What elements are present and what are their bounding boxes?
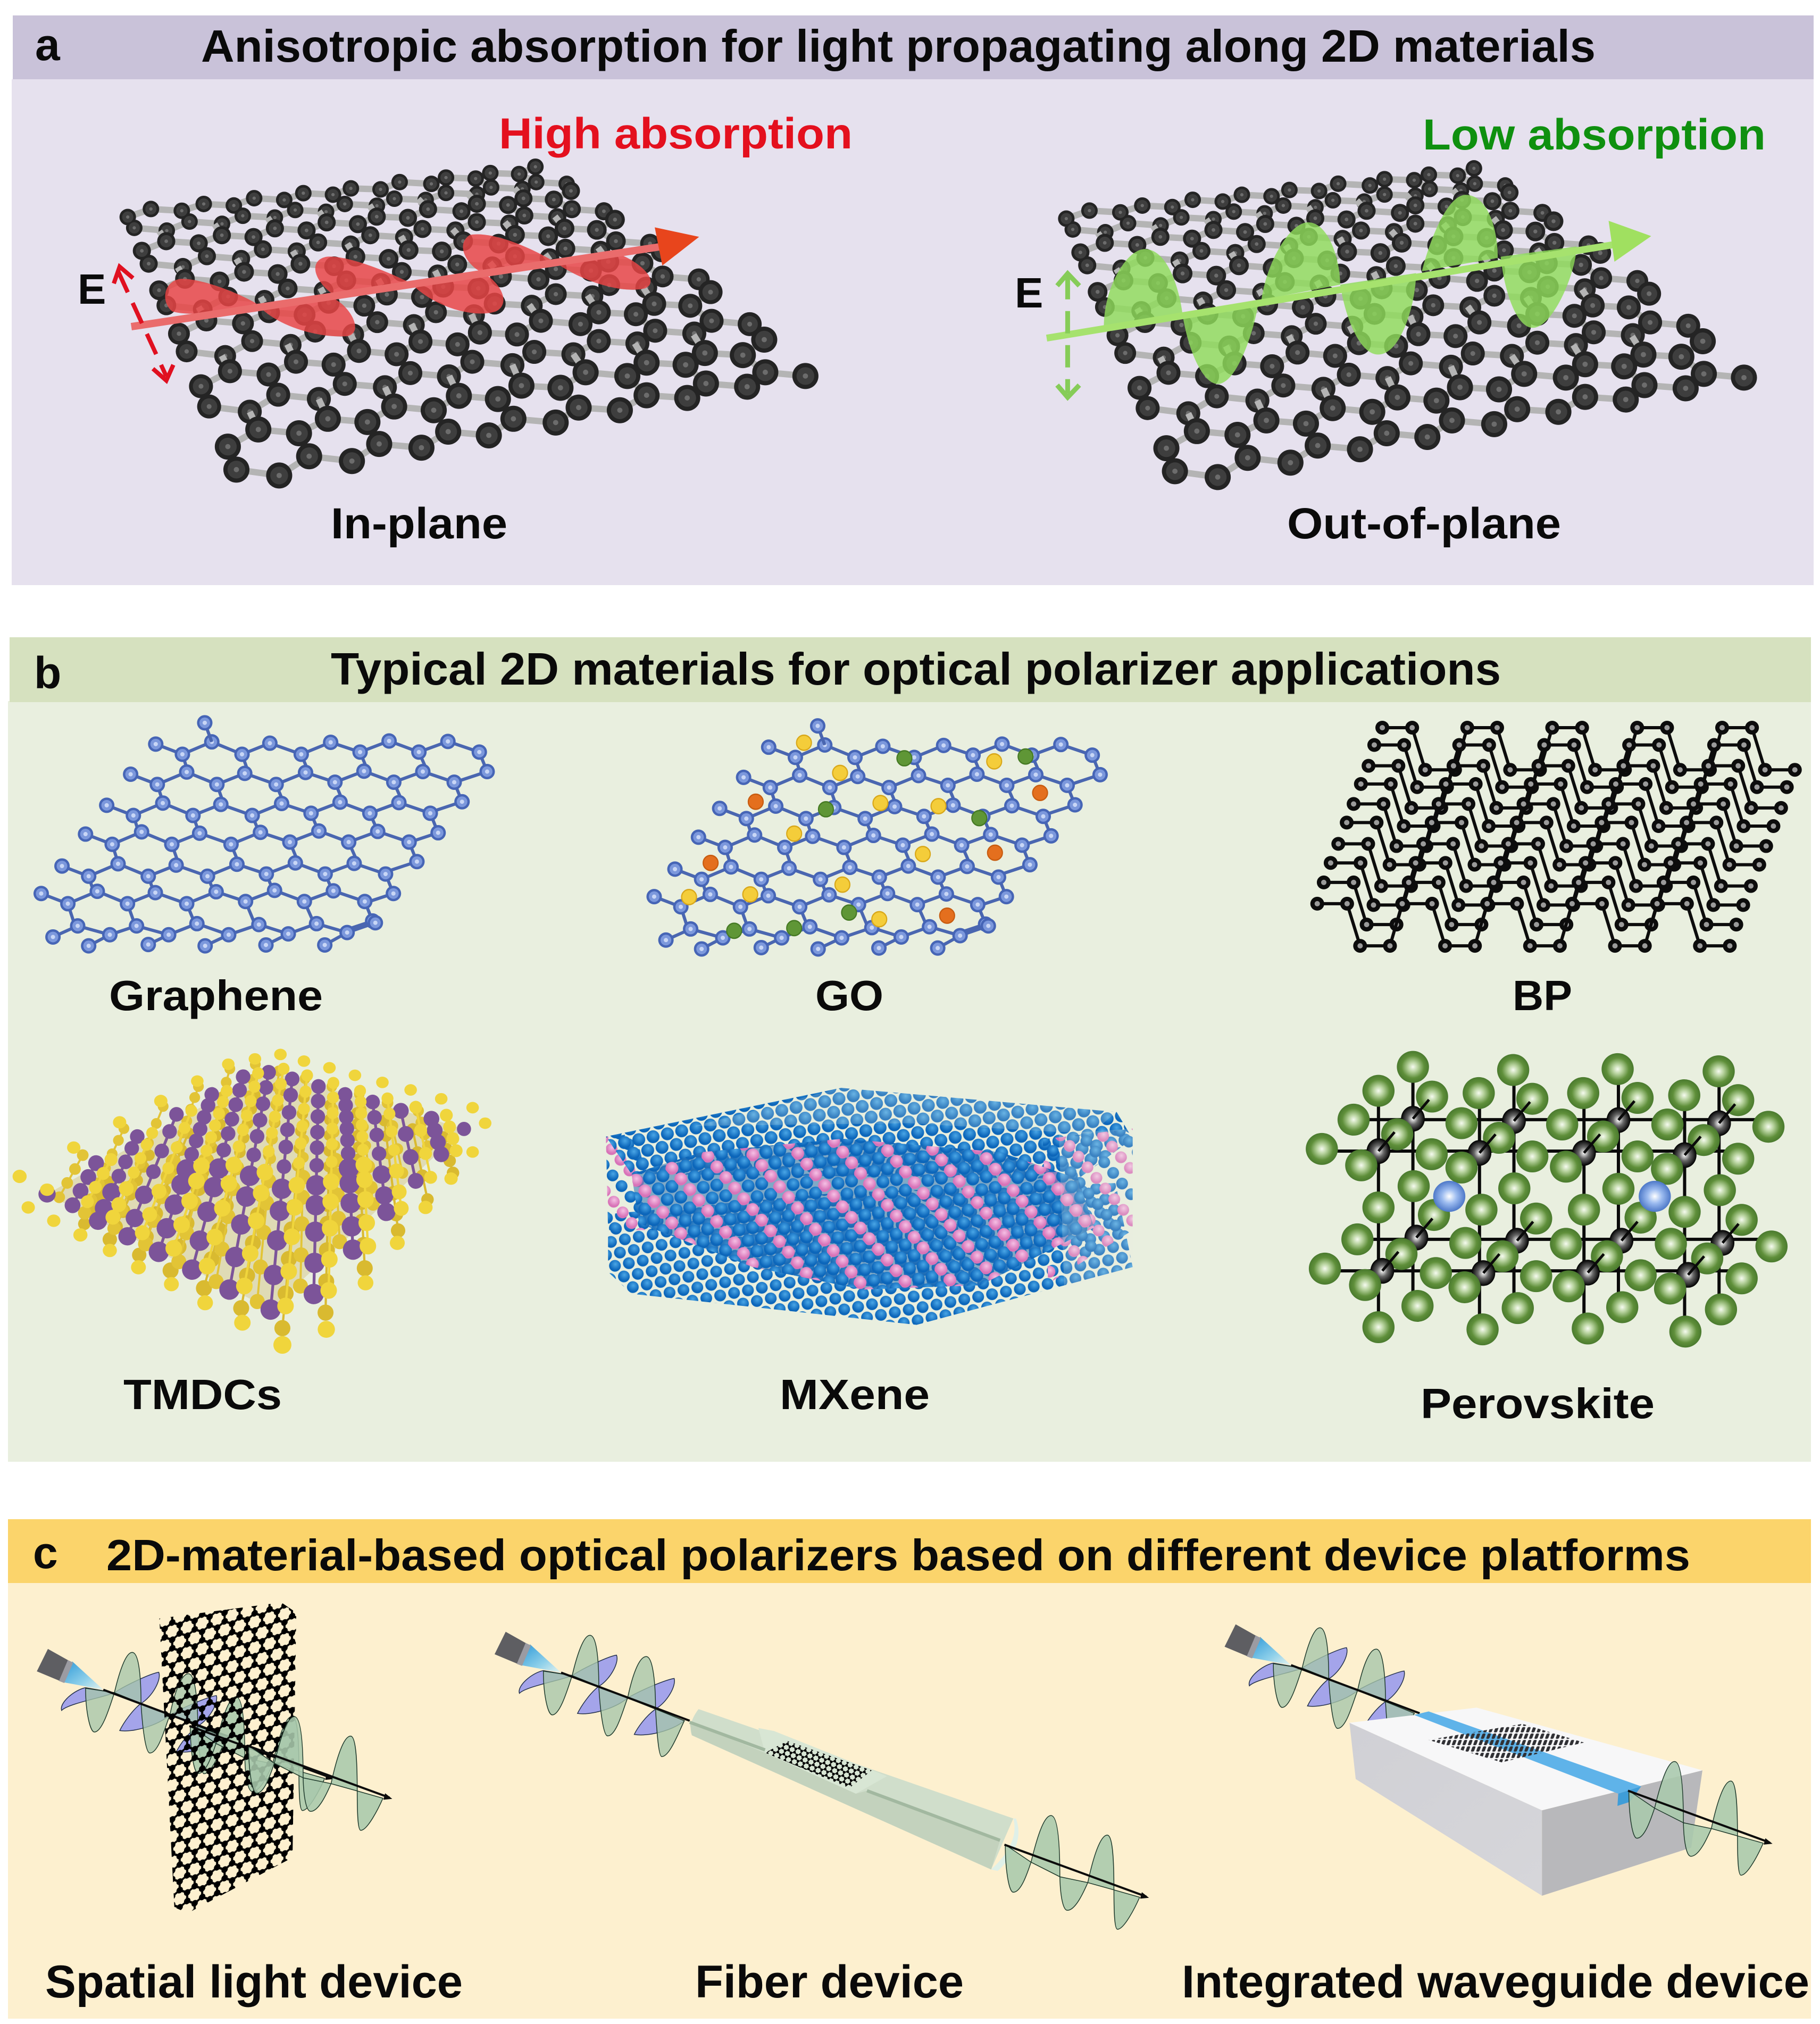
- label: MXene: MXene: [780, 1371, 930, 1418]
- label: fiber device: Fiber device: [695, 1956, 964, 2008]
- panel: b background: [8, 701, 1811, 1462]
- label: perovskite: Perovskite: [1421, 1380, 1655, 1427]
- integrated waveguide device: beam, chip, waveguide, graphene patch and output wave: [1224, 1625, 1773, 1896]
- arrow: out-of-plane E field: [1057, 273, 1079, 397]
- label: high absorption: High absorption: [499, 110, 853, 158]
- heading: panel c title: 2D-material-based optical polarizers based on different device platforms: [106, 1530, 1690, 1580]
- heading: panel a letter: a: [35, 20, 61, 70]
- label: GO: GO: [815, 972, 883, 1019]
- label: E in-plane: E: [78, 265, 106, 313]
- MXene structure: [606, 1088, 1133, 1325]
- BP structure: [1317, 728, 1795, 946]
- panel: a background: [12, 79, 1814, 585]
- label: in-plane: In-plane: [331, 499, 507, 548]
- panel: c background: [8, 1582, 1811, 2019]
- label: graphene: Graphene: [109, 972, 323, 1019]
- arrow: in-plane E field: [114, 266, 173, 380]
- in-plane wave: red E-field lobes, axis and arrowhead: [131, 227, 699, 336]
- spatial light device: beam, graphene sheet and output wave: [37, 1602, 393, 1913]
- label: TMDCs: TMDCs: [123, 1371, 282, 1418]
- label: E out-of-plane: E: [1015, 269, 1043, 316]
- label: low absorption: Low absorption: [1423, 111, 1766, 159]
- label: spatial light device: Spatial light device: [45, 1956, 463, 2008]
- graphene lattice: out-of-plane: [1066, 169, 1744, 477]
- label: integrated waveguide device: Integrated waveguide device: [1182, 1956, 1809, 2008]
- panel: a header bar: [13, 15, 1814, 79]
- GO structure with functional groups: [654, 726, 1100, 949]
- TMDC structure: [13, 1048, 491, 1354]
- heading: panel c letter: c: [33, 1528, 58, 1578]
- heading: panel b title: Typical 2D materials for optical polarizer applications: [331, 644, 1501, 695]
- out-of-plane wave: green E-field lobes, axis and arrowhead: [1047, 195, 1651, 384]
- fiber device: beam, D-shaped fiber, graphene patch and output wave: [495, 1632, 1149, 1929]
- graphene lattice: in-plane: [128, 167, 805, 476]
- graphene structure: [41, 723, 487, 946]
- label: out-of-plane: Out-of-plane: [1287, 499, 1561, 548]
- label: BP: BP: [1513, 972, 1572, 1019]
- panel: c header bar: [8, 1519, 1811, 1583]
- panel: b header bar: [10, 637, 1811, 702]
- heading: panel a title: Anisotropic absorption for light propagating along 2D materials: [201, 21, 1596, 72]
- heading: panel b letter: b: [34, 648, 61, 698]
- perovskite structure: [1306, 1051, 1788, 1347]
